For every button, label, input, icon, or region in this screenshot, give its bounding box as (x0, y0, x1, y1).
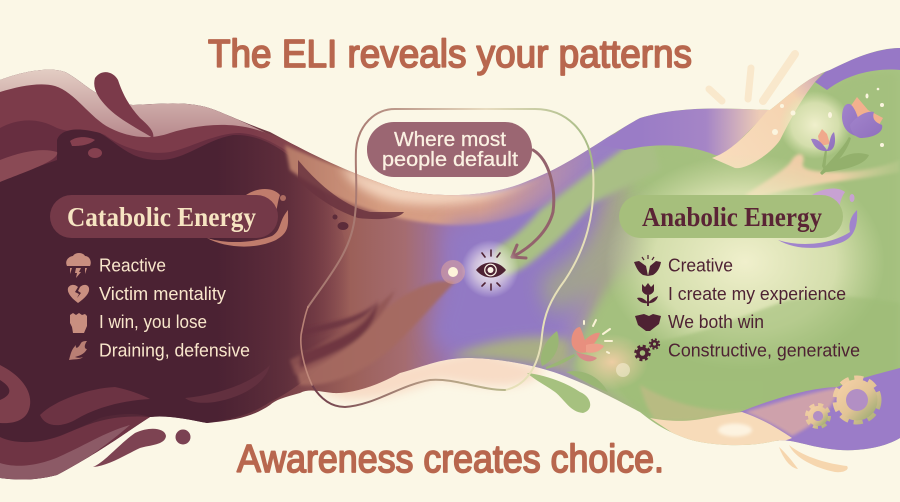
loop outline (301, 109, 593, 407)
rays (709, 54, 795, 101)
lower right lobe (185, 365, 270, 403)
pink wedge (745, 388, 838, 436)
arrow (512, 150, 554, 258)
lower green swoosh (666, 295, 866, 364)
icon: tulip (637, 283, 658, 306)
blossom (572, 327, 604, 361)
small gear (807, 405, 829, 427)
khaki band (450, 337, 570, 372)
catabolic pill (50, 195, 278, 238)
title: The ELI reveals your patterns (208, 33, 692, 76)
large gear (835, 378, 879, 422)
anabolic splash (778, 188, 857, 248)
lower drop (93, 429, 166, 467)
icon: fist (70, 313, 87, 333)
peach haze under the ribbon (320, 350, 545, 400)
peach lower band (650, 412, 792, 446)
label: creative: Creative (668, 256, 733, 276)
gears (807, 378, 879, 427)
lower teardrop (40, 387, 150, 425)
closing line: Awareness creates choice. (237, 438, 664, 481)
icon: handshake (635, 314, 661, 331)
stems and leaf (820, 137, 869, 175)
dark brown fold (298, 160, 404, 219)
lower left bands (0, 417, 150, 480)
khaki lower accent (640, 386, 738, 421)
top right purple (815, 48, 900, 90)
label: we both win: We both win (668, 312, 764, 332)
label: constructive generative: Constructive, generative (668, 340, 860, 360)
big leaf (527, 373, 590, 413)
catabolic pill: Catabolic Energy (67, 202, 256, 232)
top right flowers (709, 54, 884, 175)
catabolic splash (207, 189, 288, 247)
anabolic list (634, 255, 860, 360)
callout: where most people default: Where most (394, 128, 506, 151)
upper right soft glow (783, 94, 848, 156)
purple centre (431, 165, 610, 355)
small dark dots (332, 214, 348, 230)
lowest band (0, 425, 130, 480)
label: victim mentality: Victim mentality (99, 284, 226, 304)
anabolic pill: Anabolic Energy (642, 202, 822, 232)
label: draining defensive: Draining, defensive (99, 340, 250, 360)
catabolic list (66, 253, 250, 360)
peach streak (745, 154, 900, 200)
grey-green stream (534, 228, 638, 319)
icon: hands (634, 255, 661, 276)
leaves and stem (541, 331, 608, 392)
lower left lobe (0, 365, 30, 423)
left lobes (70, 137, 102, 158)
green stream towards eye (494, 147, 649, 277)
callout: where most people default: people default (382, 148, 518, 171)
peach upper band (285, 130, 625, 225)
icon: flame (69, 341, 87, 360)
sparkles (772, 88, 884, 147)
lower brown bands (290, 281, 455, 385)
label: i create my experience: I create my experience (668, 284, 846, 304)
label: reactive: Reactive (99, 256, 166, 276)
pale peach edge (340, 165, 540, 204)
rays (584, 320, 612, 353)
bottom peach strokes (779, 445, 848, 472)
icon: eye (476, 250, 506, 290)
large tulip (842, 97, 883, 138)
top purple band (600, 108, 770, 155)
lower right purple (740, 368, 900, 452)
lower flower (527, 320, 630, 413)
icon: gears (636, 339, 659, 360)
light glow behind anabolic text (614, 162, 876, 354)
white highlight (718, 424, 752, 436)
pale mauve crest (0, 70, 266, 138)
upper teardrop (94, 72, 153, 138)
small tulip (811, 129, 835, 151)
peach ascending band (712, 71, 825, 168)
catabolic middle layer (0, 120, 286, 166)
catabolic outer layer (0, 84, 302, 153)
callout: where most people default (367, 122, 532, 177)
lower dot (176, 430, 190, 444)
label: i win you lose: I win, you lose (99, 312, 207, 332)
icon: storm cloud (66, 253, 91, 278)
peach glow near flower (580, 337, 644, 387)
bokeh (616, 363, 630, 377)
anabolic pill (619, 195, 843, 238)
icon: broken heart (68, 285, 89, 303)
left rose ribbon fill (0, 150, 57, 182)
right green field (568, 188, 642, 414)
catabolic dark core (0, 130, 332, 423)
glow and focal dot (441, 240, 519, 298)
